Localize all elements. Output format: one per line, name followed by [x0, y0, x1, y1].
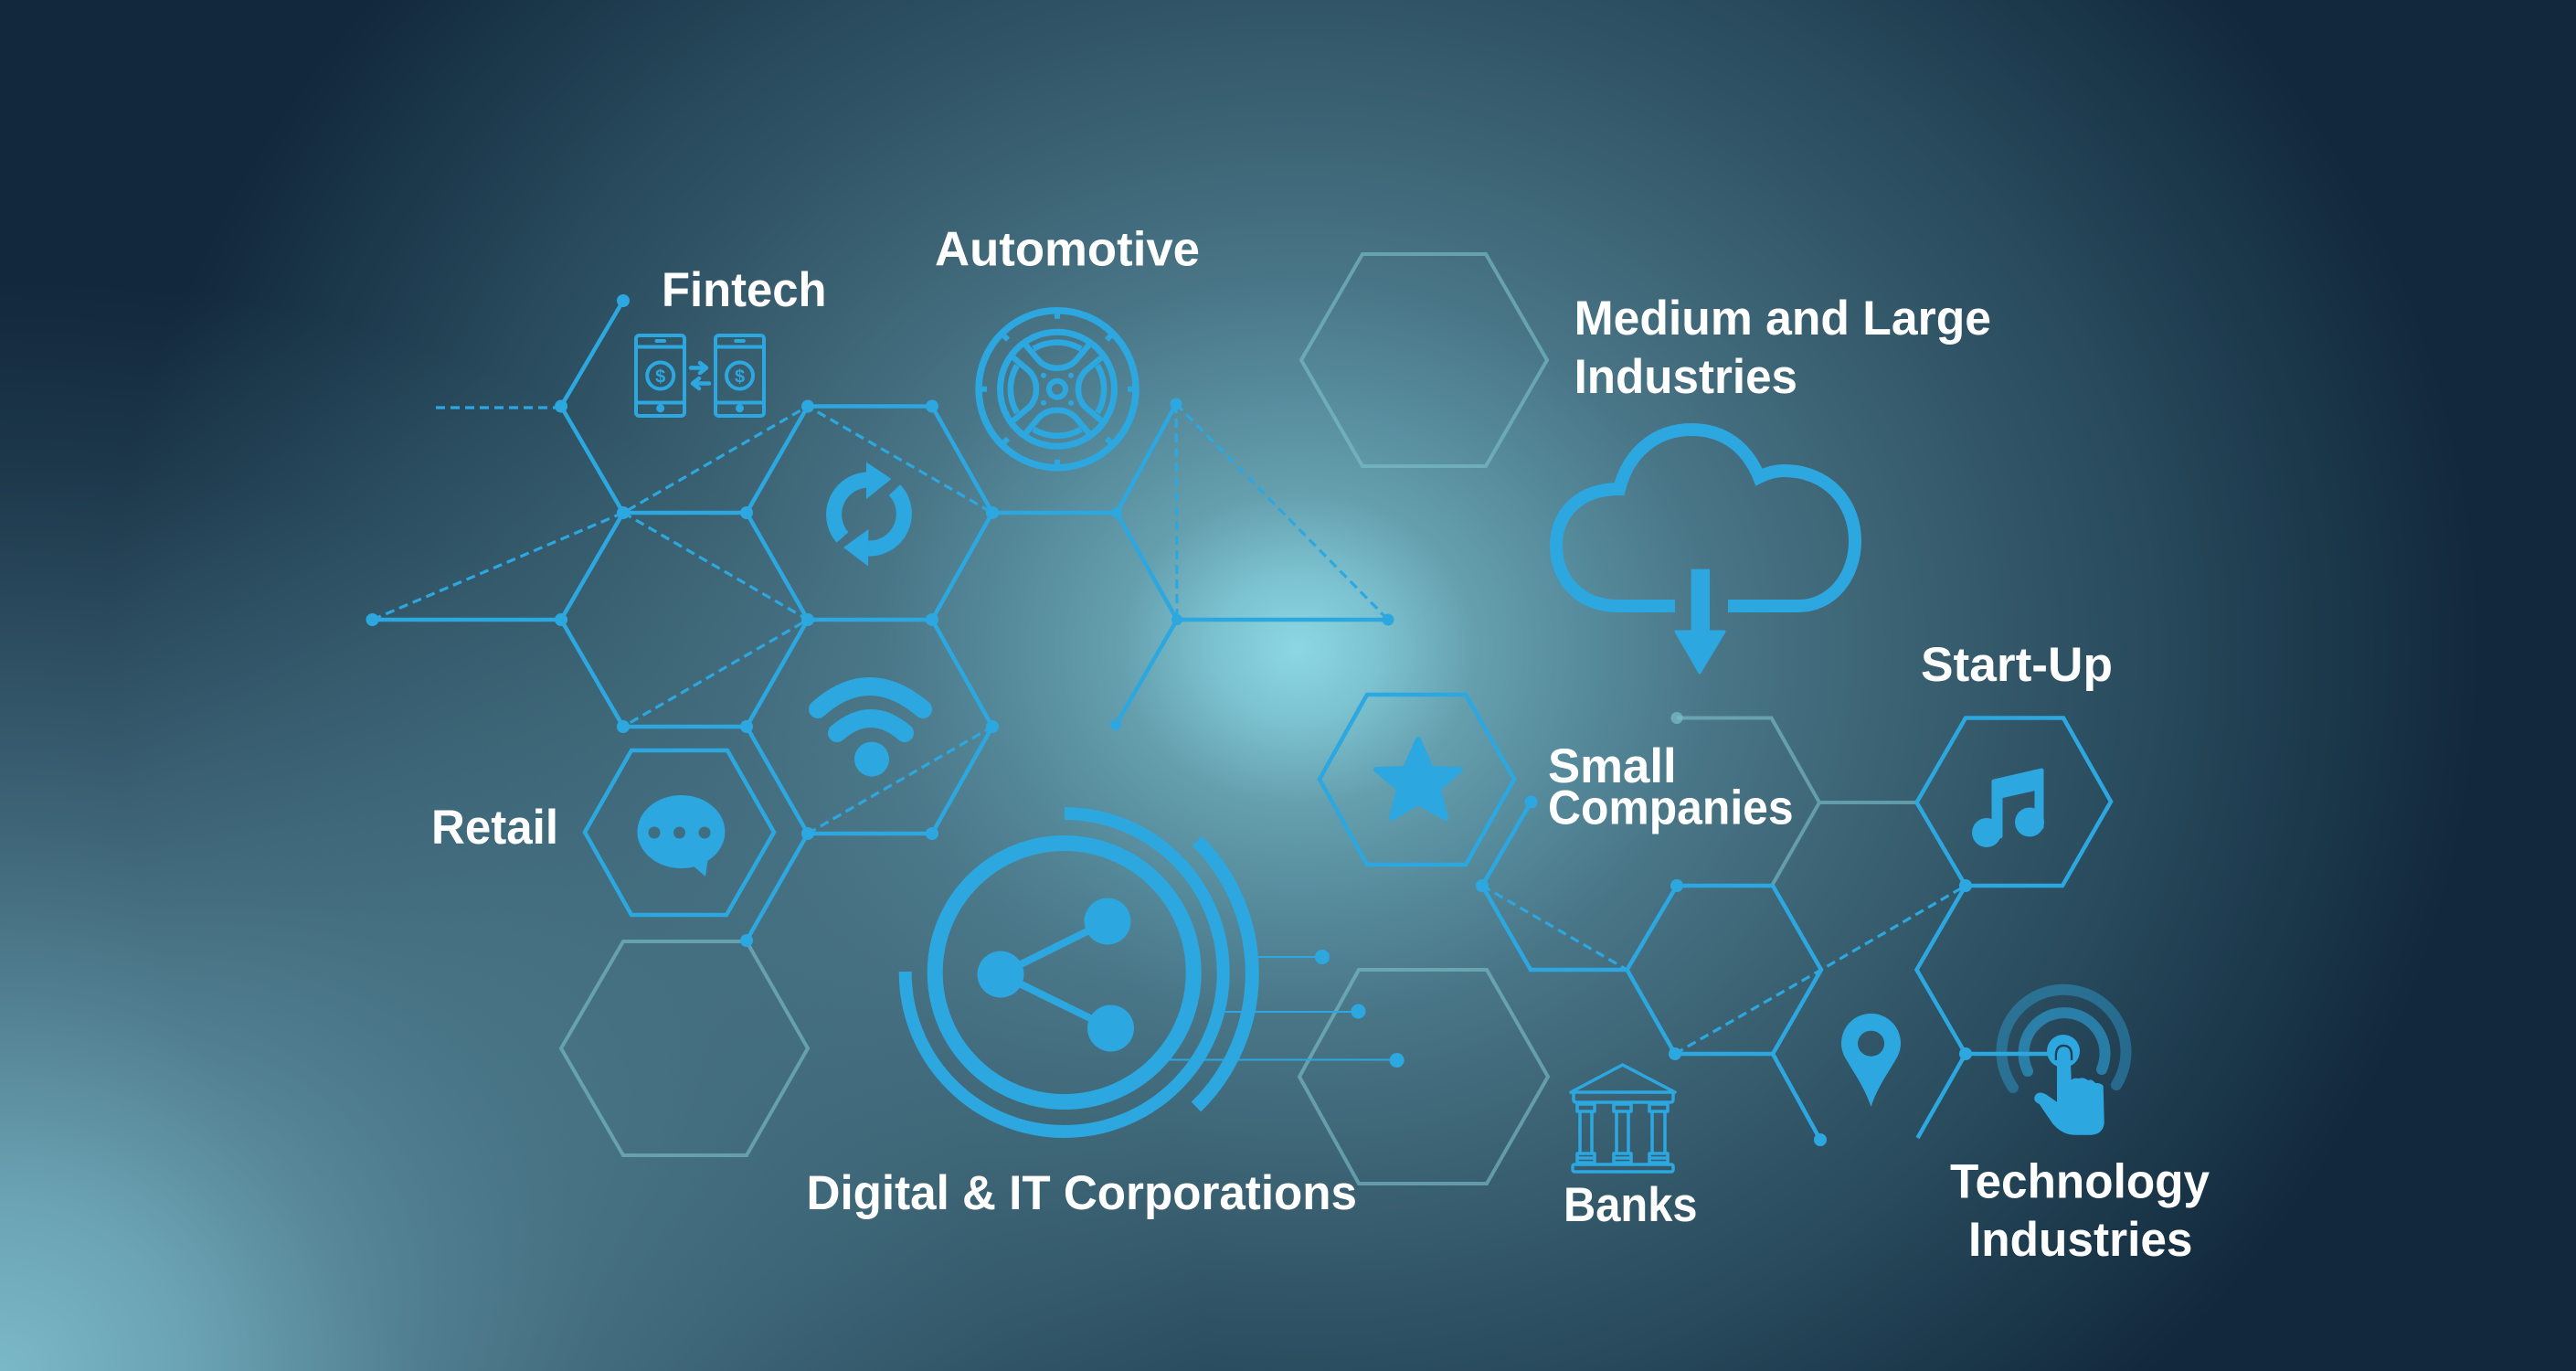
label: Banks: Banks	[1564, 1178, 1698, 1232]
icon: cloud download	[1556, 430, 1855, 673]
icon: bank	[1571, 1065, 1675, 1172]
label: Medium and Large Industries: Industries	[1574, 350, 1797, 404]
icon: share circle	[906, 813, 1405, 1132]
icon: star	[1376, 739, 1460, 818]
label: Technology Industries	[1950, 1155, 2210, 1267]
icon: music note	[1972, 771, 2044, 847]
label: Fintech: Fintech	[662, 263, 826, 317]
label: Technology Industries: Industries	[1968, 1213, 2193, 1267]
faint hexagon: lower centre	[1299, 970, 1548, 1184]
right hexagon network	[1476, 712, 2111, 1146]
label: Small Companies	[1548, 739, 1794, 835]
icon: touch hand	[1966, 990, 2125, 1135]
label: Medium and Large Industries	[1574, 292, 1991, 404]
retail hexagon	[585, 750, 774, 915]
icon: fintech phones: $	[655, 367, 665, 388]
label: Automotive: Automotive	[935, 223, 1200, 276]
icon: fintech phones: $	[735, 367, 745, 388]
icon: location pin	[1841, 1014, 1901, 1107]
icon: wheel	[976, 308, 1139, 471]
icon: wifi	[818, 686, 923, 777]
label: Digital & IT Corporations: Digital & IT Corporations	[806, 1166, 1357, 1220]
label: Retail: Retail	[431, 801, 558, 855]
label: Small Companies: Companies	[1548, 781, 1794, 835]
label: Technology Industries: Technology	[1950, 1155, 2210, 1209]
left hexagon network	[366, 294, 1394, 947]
star hexagon	[1320, 695, 1514, 865]
icon: chat bubble	[637, 795, 725, 877]
label: Small Companies: Small	[1548, 739, 1677, 793]
icon: fintech phones	[636, 335, 764, 416]
faint hexagon: lower left	[561, 941, 808, 1155]
label: Medium and Large Industries: Medium and Large	[1574, 292, 1991, 345]
label: Start-Up: Start-Up	[1921, 638, 2113, 692]
faint hexagon: top centre	[1301, 254, 1547, 466]
icon: refresh arrows	[834, 462, 904, 567]
